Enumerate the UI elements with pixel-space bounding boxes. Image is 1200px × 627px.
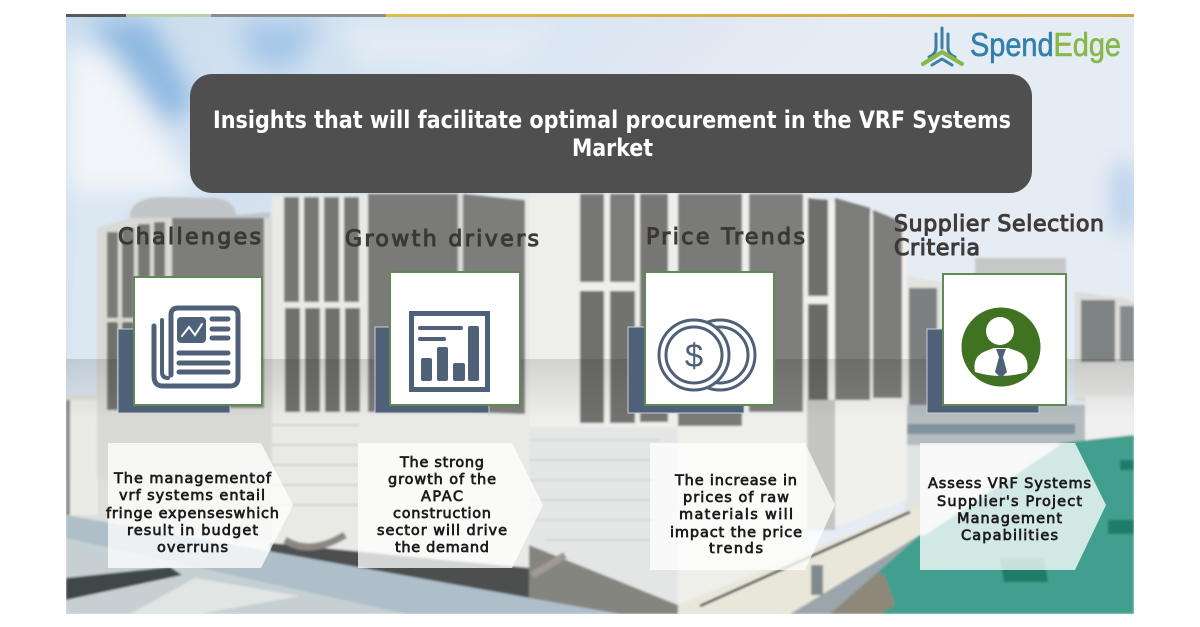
callout: supplier selection criteria: Capabilities [961, 528, 1058, 544]
callout: growth drivers: The strong [399, 455, 484, 471]
callout: challenges [106, 443, 293, 568]
top strip [66, 14, 1134, 17]
callout: price trends: prices of raw [683, 490, 789, 506]
steel beams [66, 505, 920, 614]
heading: supplier selection criteria [894, 212, 1104, 261]
icon card: price trends [628, 272, 774, 413]
title text [213, 106, 1011, 162]
icon card: supplier selection criteria [927, 274, 1066, 413]
callout: price trends: trends [709, 541, 763, 557]
icon: newspaper [154, 308, 238, 386]
ground under the beam [66, 538, 403, 614]
callout: growth drivers [358, 443, 543, 568]
icon: coins: $ [685, 337, 703, 374]
callout: growth drivers: sector will drive [377, 523, 507, 539]
callout: supplier selection criteria: Assess VRF Systems [928, 476, 1091, 492]
unit 2 [272, 194, 532, 568]
dark band across the photo [66, 359, 1134, 402]
title text: Market [572, 134, 653, 162]
heading: price trends: Price Trends [646, 225, 805, 250]
unit 1 [96, 196, 272, 412]
callout: supplier selection criteria: Supplier's Project [937, 494, 1082, 510]
dark gap and cables under unit 2 [270, 543, 530, 600]
callout: growth drivers: APAC [421, 489, 463, 505]
panel: supplier selection criteria [894, 212, 1106, 570]
panel: challenges [106, 225, 293, 568]
callout: challenges: vrf systems entail [119, 488, 265, 504]
callout: growth drivers: the demand [395, 540, 489, 556]
callout: challenges: fringe expenseswhich [106, 506, 279, 522]
callout: challenges: The managementof [113, 471, 272, 487]
far right units [905, 258, 1134, 445]
panel: price trends [628, 225, 835, 570]
icon: coins [659, 320, 755, 390]
title panel [190, 74, 1032, 193]
callout: challenges: overruns [157, 540, 228, 556]
teal roof floor [876, 434, 1134, 614]
heading: supplier selection criteria: Supplier Selection [894, 212, 1104, 237]
callout: growth drivers: growth of the [388, 472, 496, 488]
callout: price trends [650, 443, 835, 570]
callout: supplier selection criteria [920, 443, 1106, 570]
unit 3 [529, 194, 806, 605]
logo: SpendEdge [923, 26, 1121, 65]
icon card: growth drivers [375, 272, 520, 413]
heading: growth drivers: Growth drivers [345, 227, 539, 252]
icon card: challenges [118, 277, 262, 413]
callout: supplier selection criteria: Management [957, 511, 1062, 527]
callout: price trends: impact the price [670, 525, 802, 541]
unit 4 [806, 194, 907, 530]
light equipment box on the roof [905, 445, 1060, 535]
title text: Insights that will facilitate optimal procurement in the VRF Systems [213, 106, 1011, 134]
callout: price trends: The increase in [674, 473, 797, 489]
heading: supplier selection criteria: Criteria [894, 236, 980, 261]
callout: growth drivers: construction [393, 506, 491, 522]
icon: logo mark [923, 28, 962, 65]
callout: challenges: result in budget [127, 523, 258, 539]
callout: price trends: materials will [679, 507, 793, 523]
heading: challenges: Challenges [118, 225, 261, 250]
left lower wall [66, 395, 530, 570]
icon: report chart [412, 314, 488, 390]
icon: supplier person [962, 308, 1040, 386]
logo wordmark: SpendEdge [970, 26, 1121, 63]
panel: growth drivers [345, 227, 543, 568]
